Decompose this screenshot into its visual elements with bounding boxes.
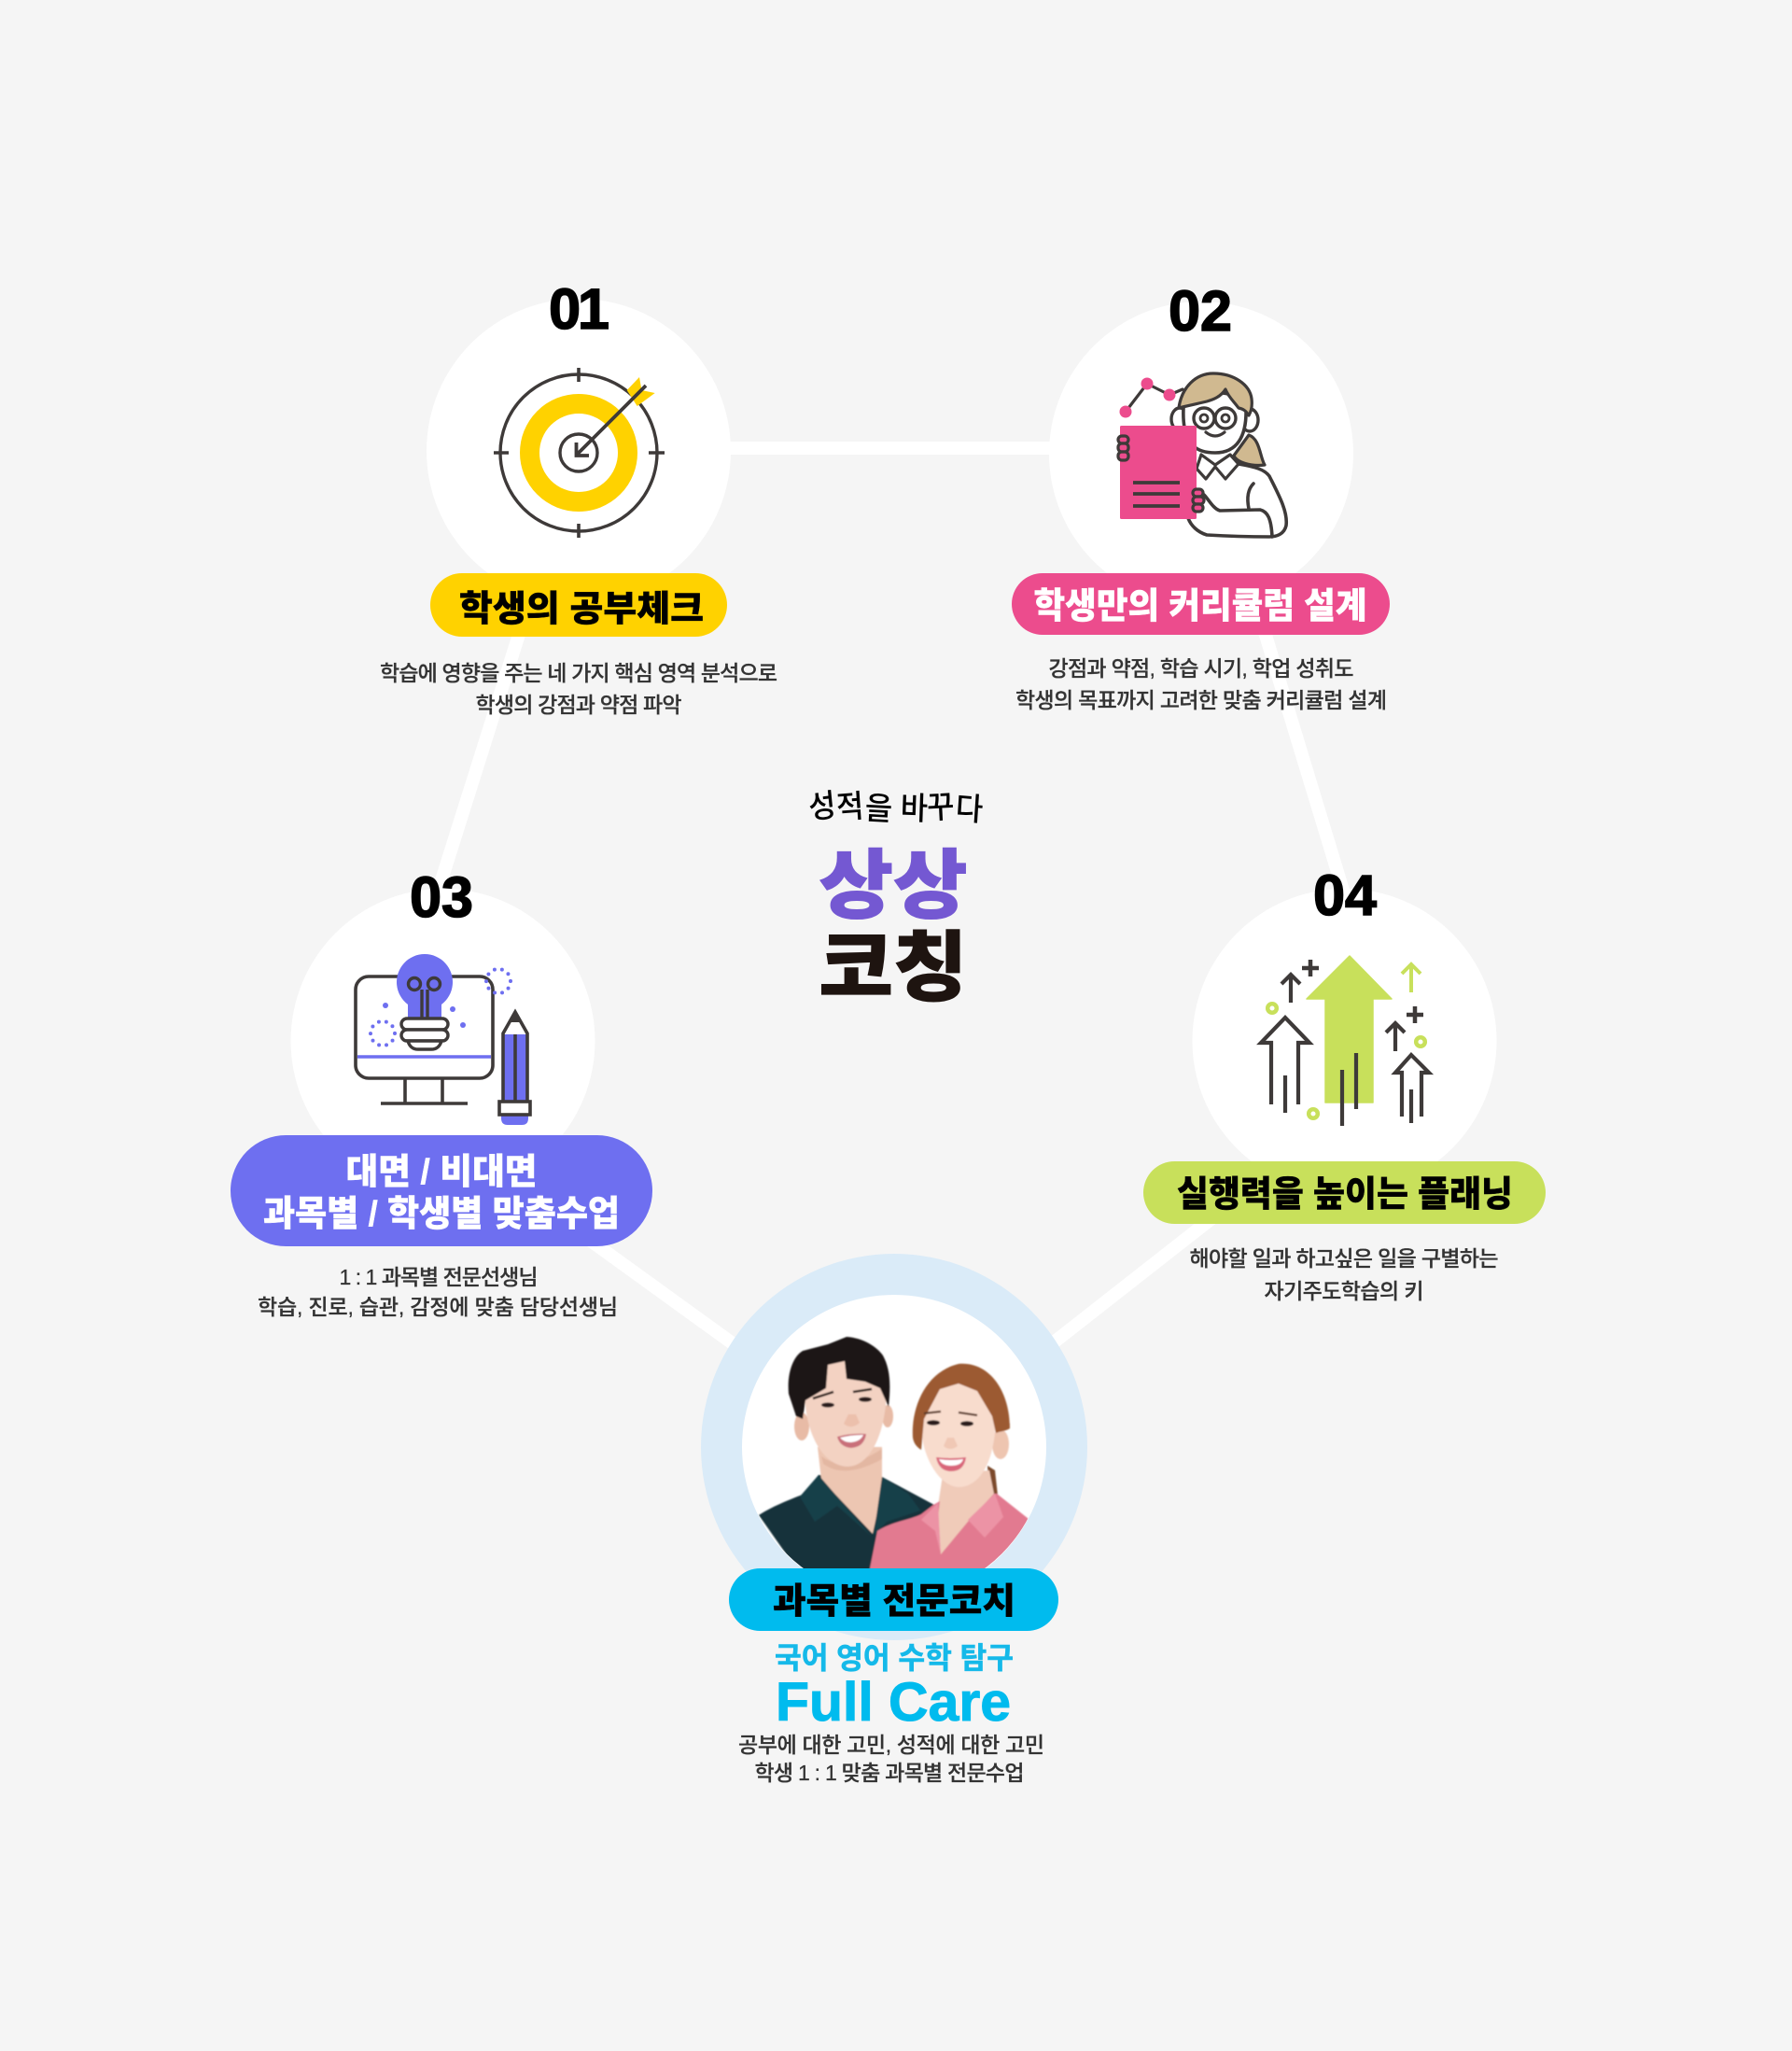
description 01: 학생의 강점과 약점 파악 <box>476 693 681 717</box>
description 02: 강점과 약점, 학습 시기, 학업 성취도 <box>1049 656 1353 681</box>
badge: 대면 / 비대면 과목별 / 학생별 맞춤수업: 과목별 / 학생별 맞춤수업 <box>263 1195 620 1234</box>
badge: 학생의 공부체크: 학생의 공부체크 <box>459 590 704 629</box>
description: 학생 1 : 1 맞춤 과목별 전문수업 <box>754 1761 1025 1785</box>
panel: subject expert coach <box>701 1254 1087 1785</box>
badge: 과목별 전문코치 <box>729 1568 1058 1631</box>
badge: 학생의 공부체크 <box>430 573 727 637</box>
description 04 <box>1189 1246 1499 1303</box>
description 01 <box>380 661 777 717</box>
number 01: 01 <box>549 277 609 341</box>
description 04: 자기주도학습의 키 <box>1264 1279 1424 1303</box>
badge: 대면 / 비대면 과목별 / 학생별 맞춤수업 <box>231 1135 652 1246</box>
handwritten tagline: 성적을 바꾸다 <box>806 788 985 828</box>
panel: step 03 face-to-face lessons <box>231 865 652 1319</box>
center title: 성적을 바꾸다 상상코칭 <box>806 788 985 1011</box>
badge: 대면 / 비대면 과목별 / 학생별 맞춤수업: 대면 / 비대면 <box>345 1153 538 1192</box>
photo illustration: two coaches <box>759 1337 1034 1578</box>
number 02: 02 <box>1169 279 1232 343</box>
number 04: 04 <box>1313 864 1377 927</box>
panel: step 04 planning <box>1143 864 1546 1303</box>
subjects line: 국어 영어 수학 탐구 <box>775 1641 1014 1675</box>
icon: target with arrow <box>494 368 665 538</box>
Full Care heading: Full Care <box>776 1672 1011 1733</box>
panel: step 01 student study check <box>380 277 777 717</box>
badge: 실행력을 높이는 플래닝 <box>1143 1161 1546 1224</box>
badge: 학생만의 커리큘럼 설계 <box>1012 573 1390 635</box>
badge: 실행력을 높이는 플래닝: 실행력을 높이는 플래닝 <box>1177 1175 1513 1215</box>
panel: step 02 personal curriculum design <box>1012 279 1390 712</box>
description 01: 학습에 영향을 주는 네 가지 핵심 영역 분석으로 <box>380 661 777 685</box>
badge: 과목별 전문코치: 과목별 전문코치 <box>773 1582 1015 1622</box>
woman <box>868 1364 1034 1578</box>
description 02 <box>1015 656 1387 712</box>
description 03: 학습, 진로, 습관, 감정에 맞춤 담당선생님 <box>258 1295 618 1319</box>
number 03: 03 <box>410 865 473 929</box>
description 04: 해야할 일과 하고싶은 일을 구별하는 <box>1189 1246 1499 1271</box>
man <box>759 1337 934 1578</box>
description <box>738 1733 1044 1785</box>
title line 2: 코칭 <box>819 926 967 1011</box>
icon: woman with document <box>1118 373 1286 537</box>
badge: 학생만의 커리큘럼 설계: 학생만의 커리큘럼 설계 <box>1034 587 1366 626</box>
title line 1: 상상 <box>819 845 967 929</box>
icon: monitor, light bulb and pencil <box>356 954 530 1125</box>
description 03: 1 : 1 과목별 전문선생님 <box>340 1265 538 1289</box>
ring and white circle <box>701 1254 1087 1640</box>
icon: rising arrows <box>1261 956 1429 1126</box>
description: 공부에 대한 고민, 성적에 대한 고민 <box>738 1733 1044 1757</box>
description 02: 학생의 목표까지 고려한 맞춤 커리큘럼 설계 <box>1015 688 1387 712</box>
description 03 <box>258 1265 618 1319</box>
